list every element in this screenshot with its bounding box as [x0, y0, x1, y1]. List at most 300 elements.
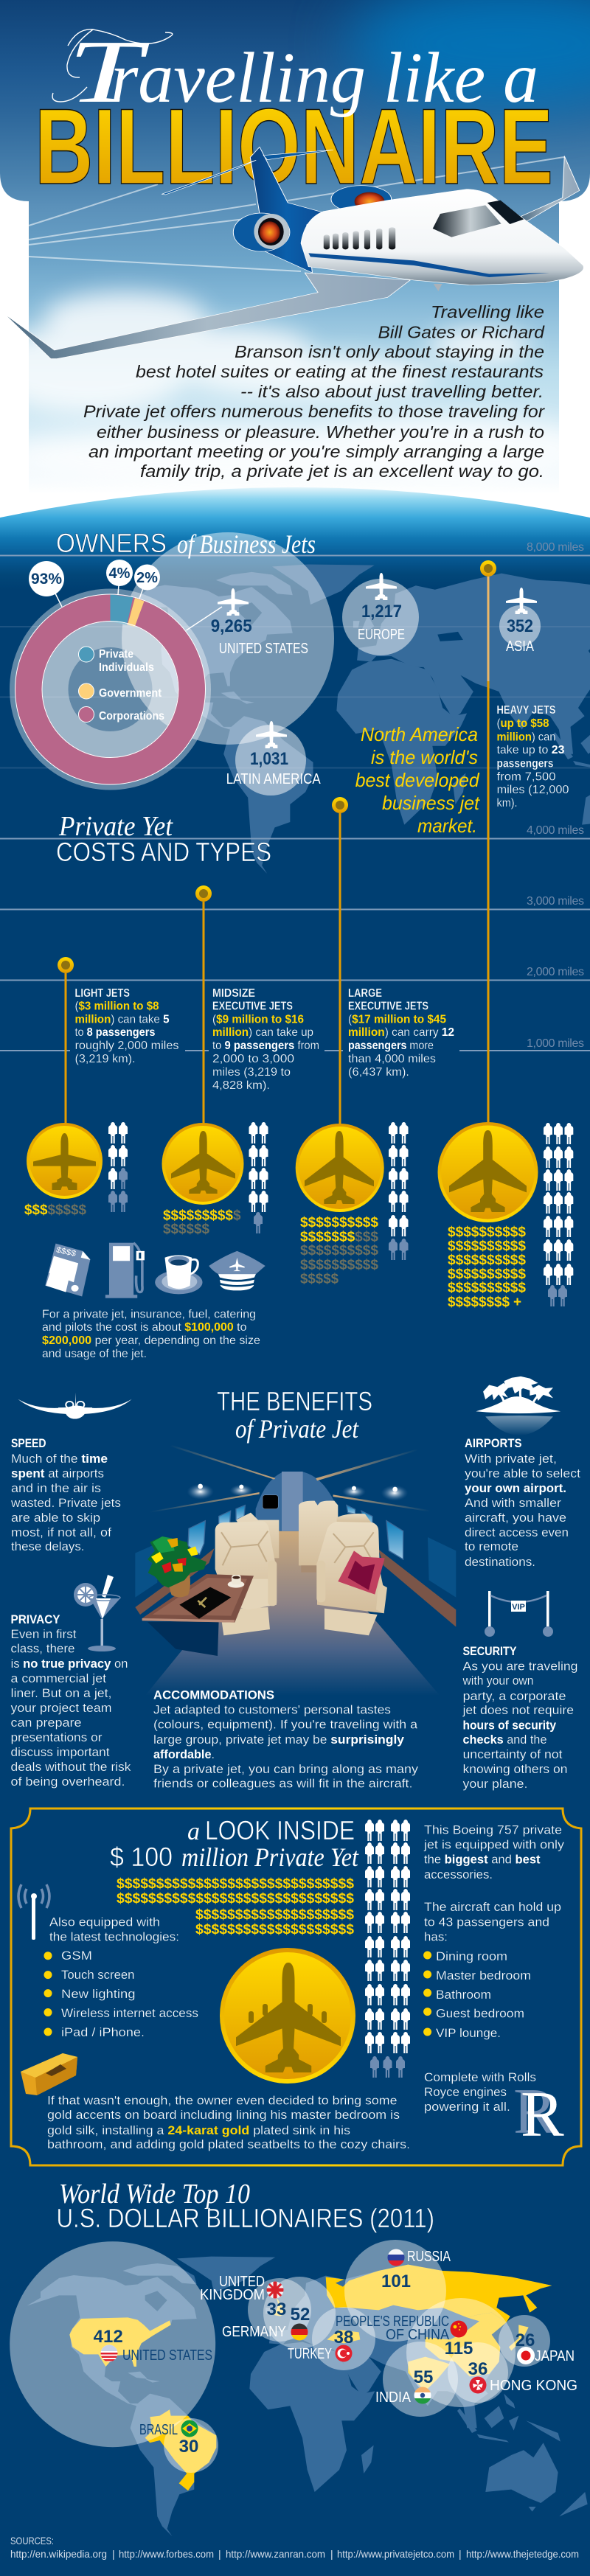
text: security [462, 1644, 578, 1791]
highlighted countries [69, 2265, 552, 2490]
heading: the benefits of private jet [217, 1386, 372, 1444]
text: privacy: your project team [10, 1701, 112, 1715]
text: large executive jets: (6,437 km). [348, 1066, 409, 1079]
sources: | [218, 2548, 221, 2560]
callout: north america: North America [361, 723, 478, 745]
sources: http://www.zanran.com [226, 2548, 325, 2560]
text: security: with your own [462, 1674, 534, 1688]
legend [78, 647, 164, 723]
germany: GERMANY [222, 2324, 286, 2340]
text: privacy: deals without the risk [10, 1760, 131, 1774]
text: midsize executive jets: 4,828 km). [212, 1079, 270, 1092]
brasil: 30 [179, 2437, 198, 2457]
menu book [179, 1587, 231, 1619]
government segment 2% [128, 598, 145, 627]
text: midsize executive jets: miles (3,219 to [212, 1066, 291, 1079]
tail stabilizers [162, 150, 333, 195]
intro paragraph: an important meeting or you're simply arranging a large [88, 442, 544, 462]
icon: invoice: $$$$ [55, 1246, 77, 1259]
miles scale lines: 1,000 miles [527, 1037, 584, 1050]
price dollars [117, 1876, 354, 1938]
united states [94, 2327, 212, 2364]
japan: JAPAN [535, 2348, 575, 2364]
united kingdom: UNITED [219, 2274, 265, 2290]
price dollars: $$$$$$$$$$$$$$$$$$$$ [195, 1922, 354, 1938]
large jet group [296, 1122, 409, 1287]
rolls royce text: Royce engines [424, 2085, 507, 2099]
cost dollars [300, 1215, 378, 1287]
icon: coffee cup [155, 1255, 202, 1294]
text: large executive jets: ($17 million to $45 [348, 1013, 446, 1026]
near engine [233, 213, 290, 251]
cost dollars: $$$$$$ [163, 1222, 209, 1237]
sources: SOURCES: [10, 2535, 54, 2547]
intro paragraph: family trip, a private jet is an excellent way to go. [140, 462, 544, 481]
text: speed: and in the air is [11, 1481, 101, 1495]
boeing description: The aircraft can hold up [424, 1900, 561, 1914]
hong kong: 36 [468, 2359, 487, 2379]
technologies list: Wireless internet access [61, 2006, 198, 2020]
text: midsize executive jets: million) can take up [212, 1026, 313, 1039]
medallion [296, 1124, 384, 1212]
text: security: knowing others on [463, 1762, 568, 1776]
heading: owners of business jets: of Business Jets [177, 529, 316, 559]
text: privacy: class, there [10, 1641, 75, 1656]
text: airports: your own airport. [465, 1481, 566, 1495]
region stats [211, 573, 537, 787]
country: india [408, 2357, 450, 2391]
rolls royce text: Complete with Rolls [424, 2070, 536, 2084]
text: accommodations: (colours, equipment). If you're traveling with a [153, 1718, 418, 1732]
text: airports [465, 1436, 580, 1569]
cost dollars: $$$$$ [300, 1272, 339, 1287]
country: uk [274, 2297, 285, 2316]
germany: 52 [291, 2305, 310, 2325]
country: china [426, 2313, 507, 2376]
bubble: united states [122, 532, 334, 745]
chart halo [10, 588, 211, 790]
near left seat [215, 1521, 277, 1635]
text: privacy: is no true privacy on [10, 1657, 128, 1671]
cheat stripe [308, 253, 549, 277]
cost dollars [163, 1208, 241, 1237]
china: 115 [445, 2339, 473, 2359]
cockpit side window [433, 205, 502, 237]
world map: owners [117, 564, 590, 874]
sources: | [459, 2548, 462, 2560]
cost dollars: $$$$$$$$$$ [448, 1239, 526, 1254]
callout: north america: is the world's [371, 746, 478, 768]
text: midsize executive jets: 2,000 to 3,000 [212, 1053, 294, 1065]
text: security: As you are traveling [463, 1660, 578, 1674]
text: light jets: (3,219 km). [75, 1053, 136, 1065]
heading: private yet costs and types: Private Yet [58, 811, 173, 842]
stat: europe: 1,217 [361, 602, 402, 622]
icon: signal antenna [18, 1884, 49, 1940]
intro paragraph: best hotel suites or eating at the finest restaurants [136, 362, 544, 381]
operating cost text: and usage of the jet. [42, 1348, 147, 1360]
cost dollars: $$$$$$$$$$ [448, 1225, 526, 1240]
rolls royce text: powering it all. [424, 2100, 510, 2114]
operating cost text: For a private jet, insurance, fuel, catering [42, 1308, 256, 1321]
icon: fuel pump [105, 1243, 145, 1298]
intro paragraph [83, 302, 545, 481]
sources: http://www.forbes.com [119, 2548, 214, 2560]
gold accents paragraph: bathroom, and adding gold plated seatbelts to the cozy chairs. [47, 2137, 410, 2151]
text: heavy jets: km). [497, 797, 518, 810]
donut chart: owners of business jets [10, 560, 222, 790]
text: speed: these delays. [11, 1539, 84, 1553]
text: airports: direct access even [465, 1525, 569, 1539]
text: heavy jets: take up to 23 [497, 744, 565, 756]
china: PEOPLE'S REPUBLIC [336, 2314, 449, 2330]
heading: the benefits of private jet: of Private Jet [235, 1414, 359, 1444]
callout 93%: 93% [31, 571, 62, 588]
turkey: 38 [334, 2328, 353, 2347]
text: large executive jets [348, 987, 454, 1079]
icon: VIP rope: VIP [512, 1603, 525, 1612]
text: heavy jets: million) can [497, 731, 556, 743]
monitor [263, 1495, 278, 1509]
text: heavy jets: passengers [497, 758, 554, 770]
text: speed: SPEED [11, 1436, 46, 1450]
russia: RUSSIA [407, 2249, 451, 2265]
text: accommodations: friends or colleagues as will fit in the aircraft. [153, 1777, 413, 1790]
bubble: europe [342, 579, 419, 655]
callout 2%: 2% [136, 570, 158, 586]
icon: VIP rope [485, 1591, 553, 1637]
text: light jets: to 8 passengers [75, 1026, 156, 1039]
boeing description: to 43 passengers and [424, 1915, 549, 1929]
china [336, 2314, 473, 2359]
passenger columns [365, 1820, 410, 2078]
far wall panels [135, 1537, 456, 1598]
operating cost text: $200,000 per year, depending on the size [42, 1334, 260, 1347]
legend: Government [99, 687, 162, 700]
text: large executive jets: million) can carry 12 [348, 1026, 454, 1039]
india [375, 2367, 433, 2406]
intro paragraph: -- it's also about just travelling better. [240, 382, 544, 401]
gold accents paragraph: gold silk, installing a 24-karat gold plated sink in his [47, 2123, 350, 2137]
legend: Individuals [99, 661, 154, 674]
cost dollars: $$$$$$$$$$ [163, 1208, 241, 1224]
text: privacy: a commercial jet [10, 1671, 106, 1685]
text: large executive jets: than 4,000 miles [348, 1053, 436, 1065]
miles scale lines: 4,000 miles [527, 824, 584, 837]
amenities list: VIP lounge. [436, 2026, 501, 2040]
india: INDIA [375, 2389, 412, 2406]
callout: north america [355, 723, 481, 837]
stat: united states: 9,265 [211, 616, 252, 636]
sources [10, 2535, 579, 2560]
intro paragraph: Branson isn't only about staying in the [235, 342, 544, 361]
brasil: BRASIL [139, 2422, 178, 2438]
light jet group [24, 1122, 128, 1218]
cabin interior illustration [135, 1445, 456, 1696]
turkey [288, 2328, 353, 2362]
country: brazil [145, 2409, 216, 2490]
hero sky background [0, 0, 590, 501]
text: accommodations: affordable. [153, 1747, 215, 1761]
text: midsize executive jets: to 9 passengers from [212, 1040, 319, 1052]
text: airports: With private jet, [465, 1452, 557, 1466]
miles scale lines: 2,000 miles [527, 966, 584, 978]
text: light jets: ($3 million to $8 [75, 1000, 159, 1013]
text: heavy jets: miles (12,000 [497, 784, 569, 796]
heading: private yet costs and types: COSTS AND TYPES [56, 837, 271, 867]
boeing description: accessories. [424, 1867, 493, 1881]
near wing [4, 273, 410, 359]
bubble: asia [499, 605, 541, 647]
cost dollars: $$$$$$$$$$ [448, 1281, 526, 1296]
legend: Corporations [99, 710, 164, 723]
operating cost text: and pilots the cost is about $100,000 to [42, 1321, 247, 1334]
ceiling beams [170, 1445, 275, 1480]
text: airports: destinations. [465, 1555, 535, 1569]
sources: http://www.thejetedge.com [466, 2548, 579, 2560]
text: privacy: of being overheard. [10, 1775, 125, 1789]
text: accommodations: Jet adapted to customers' personal tastes [153, 1703, 391, 1716]
panel frame [11, 1809, 581, 2165]
callout: north america: business jet [382, 792, 481, 814]
range pins [58, 560, 496, 973]
icon: martini [74, 1575, 120, 1651]
back wall [256, 1472, 334, 1531]
stat: latin america [226, 721, 321, 787]
text: large executive jets: passengers more [348, 1040, 434, 1052]
heading: world wide top 10 billionaires: World Wide Top 10 [59, 2179, 250, 2210]
panel heading: LOOK INSIDE [205, 1815, 355, 1845]
rolls royce text [424, 2070, 536, 2114]
amenities list: Bathroom [436, 1988, 491, 2002]
text: security: hours of security [463, 1718, 556, 1733]
text: security: your plane. [463, 1777, 528, 1791]
technologies list: Also equipped with [49, 1915, 160, 1929]
intro paragraph: Private jet offers numerous benefits to those traveling for [83, 402, 545, 421]
cost dollars: $$$$$$$$$$ [448, 1267, 526, 1282]
technologies list: the latest technologies: [49, 1930, 179, 1944]
windscreen [487, 201, 524, 224]
boeing description: has: [424, 1930, 448, 1944]
red cushion [338, 1550, 385, 1595]
heading: world wide top 10 billionaires [56, 2179, 434, 2233]
heading: owners of business jets: OWNERS [56, 528, 167, 558]
panel heading: $ 100 [110, 1842, 173, 1872]
japan [516, 2330, 575, 2364]
stat: europe [358, 573, 405, 643]
icon: pilot cap [209, 1251, 266, 1290]
technologies list: GSM [61, 1949, 92, 1963]
intro paragraph: Bill Gates or Richard [378, 323, 545, 342]
passenger icons [544, 1123, 573, 1306]
text: midsize executive jets: EXECUTIVE JETS [212, 1000, 293, 1013]
gold accents paragraph: gold accents on board including lining his master bedroom is [47, 2108, 400, 2122]
flower arrangement [148, 1536, 206, 1597]
text: midsize executive jets: ($9 million to $16 [212, 1013, 304, 1026]
heavy jet group [438, 1122, 573, 1310]
passenger icons [108, 1122, 128, 1212]
country labels and flags [94, 2249, 577, 2457]
text: speed: Much of the time [11, 1452, 108, 1466]
text: speed: wasted. Private jets [10, 1496, 121, 1510]
heading: private yet costs and types [56, 811, 271, 867]
text: large executive jets: EXECUTIVE JETS [348, 1000, 428, 1013]
brasil [139, 2420, 198, 2457]
heading: world wide top 10 billionaires: U.S. DOLLAR BILLIONAIRES (2011) [56, 2203, 434, 2233]
gold accents paragraph: If that wasn't enough, the owner even decided to bring some [47, 2094, 397, 2107]
panel heading: a [187, 1818, 200, 1845]
coffee cup [228, 1575, 244, 1588]
text: security: jet does not require [462, 1703, 574, 1717]
connector lines [55, 585, 222, 630]
text: speed: most, if not all, of [11, 1525, 111, 1539]
stat: united states [211, 588, 308, 657]
text: heavy jets: from 7,500 [497, 771, 556, 783]
cost dollars: $$$$$$$$ [24, 1202, 86, 1218]
side trim [135, 1548, 456, 1627]
chart rings [15, 594, 205, 784]
title script: Travelling like a: T [68, 22, 150, 122]
text: midsize executive jets [212, 987, 319, 1092]
boeing description: the biggest and best [424, 1853, 541, 1867]
text: accommodations: By a private jet, you can bring along as many [153, 1762, 419, 1776]
stat: latin america: LATIN AMERICA [226, 771, 321, 787]
billionaire country bubbles [10, 2240, 550, 2473]
far seats [236, 1501, 371, 1573]
text: accommodations: ACCOMMODATIONS [153, 1688, 274, 1702]
medallion [438, 1122, 538, 1222]
cost dollars: + [513, 1295, 521, 1310]
price dollars: $$$$$$$$$$$$$$$$$$$$ [195, 1907, 354, 1923]
miles scale lines [0, 541, 590, 1051]
amenities list: Dining room [436, 1949, 507, 1963]
sources: http://www.privatejetco.com [337, 2548, 454, 2560]
technologies list: New lighting [61, 1987, 136, 2001]
hong kong [468, 2359, 577, 2394]
turkey: TURKEY [288, 2346, 332, 2362]
tail fin [250, 147, 324, 273]
callout: north america: best developed [355, 769, 480, 791]
rolls royce logo: R [513, 2076, 557, 2148]
text: privacy: presentations or [10, 1730, 103, 1744]
text: heavy jets: (up to $58 [497, 717, 549, 730]
cost dollars: $$$$$$$$$$ [448, 1253, 526, 1268]
private individuals segment 4% [111, 594, 133, 625]
icon: jet front view [18, 1393, 132, 1419]
india: 55 [414, 2367, 433, 2387]
range pin stems [66, 577, 488, 1128]
cabin lights [187, 1484, 408, 1501]
text: privacy: Even in first [10, 1627, 77, 1641]
panel heading [110, 1815, 359, 1872]
text: airports: you're able to select [465, 1466, 580, 1480]
bubble: latin america [235, 725, 306, 796]
callout 4%: 4% [109, 565, 131, 582]
operating cost text [42, 1308, 260, 1360]
stat: latin america: 1,031 [250, 749, 288, 769]
table [142, 1574, 254, 1656]
far engine [330, 185, 392, 209]
icon: gold bar [21, 2053, 77, 2095]
title script: Travelling like a: ravelling like a [111, 38, 538, 118]
country: turkey [327, 2330, 360, 2343]
text: security: checks and the [463, 1733, 547, 1747]
rolls royce logo: R [521, 2079, 564, 2151]
text: speed [10, 1436, 121, 1553]
price dollars: $$$$$$$$$$$$$$$$$$$$$$$$$$$$$$ [117, 1891, 354, 1907]
gold accents paragraph [47, 2094, 410, 2151]
technologies list [44, 1915, 198, 2039]
cabin windows [324, 227, 395, 249]
icon: invoice [45, 1244, 90, 1296]
russia: 101 [381, 2272, 411, 2291]
united states: UNITED STATES [122, 2347, 212, 2364]
icon: palm island [476, 1376, 560, 1435]
china: OF CHINA [386, 2327, 450, 2343]
stat: united states: UNITED STATES [219, 641, 308, 657]
text: privacy: liner. But on a jet, [10, 1686, 112, 1700]
cost dollars: $$$$$$$$$$ [300, 1258, 378, 1273]
back wall centre panel [282, 1472, 303, 1531]
cost dollars [448, 1225, 526, 1310]
stat: asia: ASIA [506, 638, 535, 655]
text: speed: spent at airports [11, 1466, 104, 1480]
callout 93% [29, 561, 64, 596]
region bubbles [122, 532, 541, 796]
text: security: SECURITY [463, 1644, 517, 1658]
cost dollars: $$$$$$$$$$ [300, 1243, 378, 1259]
amenities list: Master bedroom [436, 1968, 531, 1983]
country: russia [326, 2265, 552, 2322]
text: light jets: roughly 2,000 miles [75, 1040, 178, 1052]
text: security: party, a corporate [463, 1689, 566, 1703]
text: airports: aircraft, you have [465, 1511, 566, 1525]
intro paragraph: Travelling like [431, 302, 544, 321]
corporations segment 93% [29, 608, 192, 771]
sources: | [112, 2548, 115, 2560]
far wing tip [521, 156, 580, 223]
amenities list [423, 1949, 531, 2040]
stat: asia [506, 588, 537, 655]
text: accommodations: large group, private jet may be surprisingly [153, 1733, 405, 1747]
sources: http://en.wikipedia.org [10, 2548, 107, 2560]
text: midsize executive jets: MIDSIZE [212, 987, 255, 1000]
text: speed: are able to skip [11, 1511, 100, 1525]
text: light jets [75, 987, 178, 1065]
medallion [162, 1123, 243, 1205]
amenities list: Guest bedroom [436, 2007, 524, 2021]
legend: Private [99, 648, 133, 661]
boeing description: This Boeing 757 private [424, 1823, 562, 1837]
mile labels: 8,000 miles [527, 541, 584, 554]
boeing description: jet is equipped with only [423, 1838, 565, 1852]
fuselage [301, 189, 584, 285]
main title [40, 29, 550, 184]
carpet [145, 1531, 440, 1696]
medallion [27, 1123, 103, 1199]
private jet illustration [4, 147, 584, 359]
cost dollars: $$$$$$$$$$ [300, 1230, 378, 1245]
midsize jet group [162, 1122, 268, 1237]
country: japan [509, 2325, 529, 2350]
text: privacy [10, 1612, 131, 1789]
japan: 26 [516, 2330, 535, 2350]
text: light jets: million) can take 5 [75, 1013, 170, 1026]
text: privacy: discuss important [10, 1745, 110, 1759]
heading: owners of business jets [57, 533, 315, 559]
text: airports: And with smaller [465, 1496, 561, 1510]
cost dollars: $$$$$$$$ [448, 1295, 510, 1310]
